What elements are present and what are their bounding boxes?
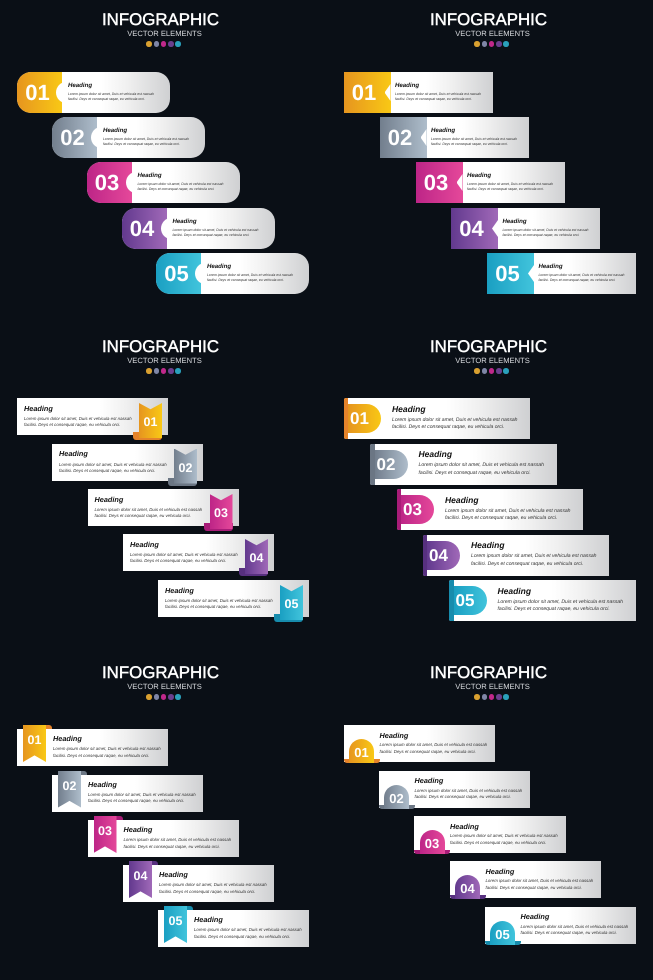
step 01: [17, 398, 168, 435]
step 03: 03: [98, 824, 112, 838]
step 05: Lorem ipsum dolor sit amet, Duis et vehicula est nassah: [207, 273, 293, 277]
step 03: [86, 162, 240, 203]
step 05: facilisi. Deys et consequat raqae, eu vehicula orci.: [194, 934, 290, 939]
step 05: 05: [164, 261, 189, 286]
step 01: facilisi. Deys et consequat raqae, eu vehicula orci.: [53, 753, 149, 758]
step 04: Heading: [486, 866, 514, 876]
panel: arch badge steps: [344, 663, 636, 945]
step 05: Heading: [207, 263, 231, 270]
step 01: Heading: [395, 82, 419, 89]
step 02: Lorem ipsum dolor sit amet, Duis et vehicula est nassah: [88, 792, 196, 796]
step 01: 01: [352, 80, 376, 105]
step 02: facilisi. Deys et consequat raqae, eu vehicula orci.: [431, 142, 508, 146]
step 05: Lorem ipsum dolor sit amet, Duis et vehicula est nassah: [194, 927, 302, 932]
step 05: 05: [285, 597, 298, 611]
step 01: Lorem ipsum dolor sit amet, Duis et vehicula est nassah: [395, 92, 481, 96]
panel: half-pill steps: [344, 337, 636, 621]
step 02: [52, 117, 205, 158]
step 03: Heading: [94, 495, 123, 504]
step 01: Lorem ipsum dolor sit amet, Duis et vehicula est nassah: [380, 742, 487, 747]
step 01: 01: [144, 415, 157, 429]
panel heading: [430, 10, 547, 47]
step 05: [158, 580, 309, 617]
step 05: [158, 910, 309, 947]
step 04: Heading: [159, 870, 188, 879]
step 01: Heading: [392, 404, 426, 414]
step 04: [422, 534, 609, 576]
panel heading: VECTOR ELEMENTS: [127, 356, 202, 365]
step 03: facilisi. Deys et consequat raqae, eu vehicula orci.: [138, 187, 214, 191]
panel heading: VECTOR ELEMENTS: [455, 356, 530, 365]
step 04: Lorem ipsum dolor sit amet, Duis et vehicula est nassah: [502, 228, 588, 232]
panel heading: INFOGRAPHIC: [430, 337, 547, 356]
step 05: Heading: [520, 912, 549, 921]
step 04: Lorem ipsum dolor sit amet, Duis et vehicula est nassah: [159, 882, 267, 887]
step 02: [52, 444, 203, 480]
step 05: 05: [495, 926, 510, 942]
step 01: 01: [25, 80, 50, 105]
panel: left ribbon steps: [17, 663, 309, 947]
step 02: [380, 117, 528, 158]
step 05: Lorem ipsum dolor sit amet, Duis et vehicula est nassah: [165, 598, 273, 603]
step 05: Heading: [194, 915, 223, 924]
step 05: facilisi. Deys et consequat raqae, eu vehicula orci.: [498, 606, 610, 612]
step 01: facilisi. Deys et consequat raqae, eu vehicula orci.: [24, 422, 120, 427]
panel heading: [102, 337, 219, 374]
step 04: facilisi. Deys et consequat raqae, eu vehicula orci.: [486, 885, 582, 890]
step 04: Heading: [172, 218, 197, 225]
step 02: Heading: [103, 127, 127, 134]
panel heading: [430, 337, 547, 374]
step 03: [396, 489, 583, 530]
step 02: Heading: [88, 780, 117, 789]
step 05: Heading: [165, 586, 194, 595]
step 05: 05: [169, 914, 182, 928]
step 03: 03: [95, 170, 119, 195]
step 02: facilisi. Deys et consequat raqae, eu vehicula orci.: [418, 470, 531, 476]
panel heading: [102, 10, 219, 47]
step 03: [88, 489, 238, 526]
step 03: 03: [424, 170, 448, 195]
step 04: Lorem ipsum dolor sit amet, Duis et vehicula est nassah: [471, 553, 596, 559]
step 04: Heading: [502, 218, 527, 225]
step 04: facilisi. Deys et consequat raqae, eu vehicula orci.: [502, 233, 579, 237]
step 02: Heading: [414, 776, 443, 785]
step 03: 03: [425, 836, 439, 851]
step 04: [450, 861, 601, 898]
step 04: Lorem ipsum dolor sit amet, Duis et vehicula est nassah: [172, 228, 258, 232]
step 02: 02: [60, 125, 85, 150]
step 04: 04: [459, 216, 484, 241]
step 03: [416, 162, 564, 203]
panel heading: VECTOR ELEMENTS: [455, 682, 530, 691]
step 05: facilisi. Deys et consequat raqae, eu vehicula orci.: [207, 278, 284, 282]
step 03: 03: [403, 500, 422, 519]
step 03: Lorem ipsum dolor sit amet, Duis et vehicula est nassah: [467, 182, 553, 186]
step 01: Lorem ipsum dolor sit amet, Duis et vehicula est nassah: [68, 92, 154, 96]
panel heading: VECTOR ELEMENTS: [127, 29, 202, 38]
step 03: Heading: [467, 172, 491, 179]
panel heading: INFOGRAPHIC: [102, 10, 219, 29]
step 03: Lorem ipsum dolor sit amet, Duis et vehicula est nassah: [450, 833, 558, 838]
step 02: Lorem ipsum dolor sit amet, Duis et vehicula est nassah: [59, 462, 167, 466]
step 03: Lorem ipsum dolor sit amet, Duis et vehicula est nassah: [138, 182, 224, 186]
step 02: facilisi. Deys et consequat raqae, eu vehicula orci.: [59, 468, 155, 472]
panel heading: INFOGRAPHIC: [102, 663, 219, 682]
step 01: Lorem ipsum dolor sit amet, Duis et vehicula est nassah: [53, 746, 161, 751]
step 02: Heading: [418, 449, 452, 459]
step 04: facilisi. Deys et consequat raqae, eu vehicula orci.: [172, 233, 249, 237]
step 01: [344, 398, 530, 439]
step 05: Heading: [538, 263, 563, 270]
step 02: 02: [389, 790, 404, 806]
step 01: 01: [350, 409, 369, 428]
step 03: Heading: [450, 822, 479, 830]
step 02: facilisi. Deys et consequat raqae, eu vehicula orci.: [414, 794, 511, 799]
panel: right ribbon steps: [17, 337, 309, 622]
step 05: [449, 580, 636, 621]
step 02: Heading: [431, 127, 455, 134]
step 02: 02: [377, 454, 395, 474]
step 02: facilisi. Deys et consequat raqae, eu vehicula orci.: [103, 142, 180, 146]
step 03: [88, 820, 238, 857]
step 05: Lorem ipsum dolor sit amet, Duis et vehicula est nassah: [520, 924, 628, 928]
step 03: facilisi. Deys et consequat raqae, eu vehicula orci.: [467, 187, 544, 191]
step 01: Heading: [68, 82, 92, 89]
step 05: [156, 253, 309, 294]
step 04: facilisi. Deys et consequat raqae, eu vehicula orci.: [471, 561, 583, 567]
step 03: facilisi. Deys et consequat raqae, eu vehicula orci.: [450, 840, 546, 845]
step 02: [378, 770, 530, 808]
step 01: facilisi. Deys et consequat raqae, eu vehicula orci.: [380, 749, 476, 754]
step 02: [370, 444, 556, 484]
step 02: Lorem ipsum dolor sit amet, Duis et vehicula est nassah: [431, 137, 517, 141]
step 01: facilisi. Deys et consequat raqae, eu vehicula orci.: [395, 97, 472, 101]
panel heading: VECTOR ELEMENTS: [127, 682, 202, 691]
step 04: 04: [134, 869, 147, 883]
step 01: facilisi. Deys et consequat raqae, eu vehicula orci.: [68, 97, 145, 101]
step 01: [344, 725, 495, 762]
step 02: 02: [388, 125, 412, 150]
step 02: Lorem ipsum dolor sit amet, Duis et vehicula est nassah: [418, 462, 544, 468]
step 01: Heading: [53, 734, 82, 743]
step 02: facilisi. Deys et consequat raqae, eu vehicula orci.: [88, 798, 184, 803]
step 05: [484, 906, 636, 944]
step 05: facilisi. Deys et consequat raqae, eu vehicula orci.: [538, 278, 615, 282]
panel heading: INFOGRAPHIC: [102, 337, 219, 356]
step 03: facilisi. Deys et consequat raqae, eu vehicula orci.: [94, 513, 191, 518]
step 04: [122, 208, 274, 249]
step 01: [344, 72, 492, 113]
step 01: 01: [354, 745, 369, 760]
step 03: facilisi. Deys et consequat raqae, eu vehicula orci.: [124, 844, 220, 849]
step 03: Lorem ipsum dolor sit amet, Duis et vehicula est nassah: [94, 507, 202, 512]
step 03: Heading: [445, 494, 479, 504]
step 04: Lorem ipsum dolor sit amet, Duis et vehicula est nassah: [130, 552, 238, 557]
step 04: facilisi. Deys et consequat raqae, eu vehicula orci.: [159, 889, 255, 894]
step 02: 02: [179, 460, 192, 474]
step 01: Heading: [24, 404, 53, 413]
panel heading: [102, 663, 219, 700]
panel: arrow-notch steps: [344, 10, 636, 294]
step 01: 01: [28, 733, 41, 747]
step 01: facilisi. Deys et consequat raqae, eu vehicula orci.: [392, 424, 504, 430]
step 05: Lorem ipsum dolor sit amet, Duis et vehicula est nassah: [498, 599, 623, 605]
step 03: facilisi. Deys et consequat raqae, eu vehicula orci.: [445, 515, 557, 521]
step 04: Heading: [130, 540, 159, 549]
step 02: 02: [63, 778, 76, 792]
step 02: Lorem ipsum dolor sit amet, Duis et vehicula est nassah: [103, 137, 189, 141]
step 04: facilisi. Deys et consequat raqae, eu vehicula orci.: [130, 558, 226, 563]
step 05: Lorem ipsum dolor sit amet, Duis et vehicula est nassah: [538, 273, 624, 277]
step 04: Lorem ipsum dolor sit amet, Duis et vehicula est nassah: [486, 878, 593, 883]
step 02: [52, 774, 203, 812]
step 01: Lorem ipsum dolor sit amet, Duis et vehicula est nassah: [392, 417, 518, 423]
step 01: Heading: [380, 730, 408, 740]
step 02: Lorem ipsum dolor sit amet, Duis et vehicula est nassah: [414, 788, 522, 792]
step 04: 04: [460, 881, 475, 896]
panel: rounded steps: [17, 10, 309, 294]
step 05: 05: [495, 261, 520, 286]
step 04: [451, 208, 600, 249]
panel heading: INFOGRAPHIC: [430, 663, 547, 682]
step 03: Heading: [124, 825, 152, 834]
step 05: facilisi. Deys et consequat raqae, eu vehicula orci.: [520, 930, 617, 935]
step 04: Heading: [471, 540, 505, 550]
step 04: [123, 534, 274, 571]
step 04: 04: [250, 551, 263, 565]
step 01: Lorem ipsum dolor sit amet, Duis et vehicula est nassah: [24, 416, 132, 421]
step 05: facilisi. Deys et consequat raqae, eu vehicula orci.: [165, 604, 261, 609]
step 04: 04: [130, 216, 154, 241]
step 05: Heading: [498, 586, 531, 596]
step 04: 04: [429, 546, 448, 564]
panel heading: [430, 663, 547, 700]
step 04: [123, 865, 274, 902]
step 03: Lorem ipsum dolor sit amet, Duis et vehicula est nassah: [445, 508, 570, 514]
step 03: Heading: [138, 172, 162, 179]
step 02: Heading: [59, 449, 88, 458]
step 03: [414, 816, 566, 853]
step 05: 05: [456, 591, 474, 610]
step 05: [487, 253, 636, 294]
panel heading: VECTOR ELEMENTS: [455, 29, 530, 38]
panel heading: INFOGRAPHIC: [430, 10, 547, 29]
step 03: Lorem ipsum dolor sit amet, Duis et vehicula est nassah: [124, 837, 231, 842]
step 01: [17, 72, 170, 113]
step 01: [17, 729, 168, 766]
step 03: 03: [214, 506, 228, 520]
